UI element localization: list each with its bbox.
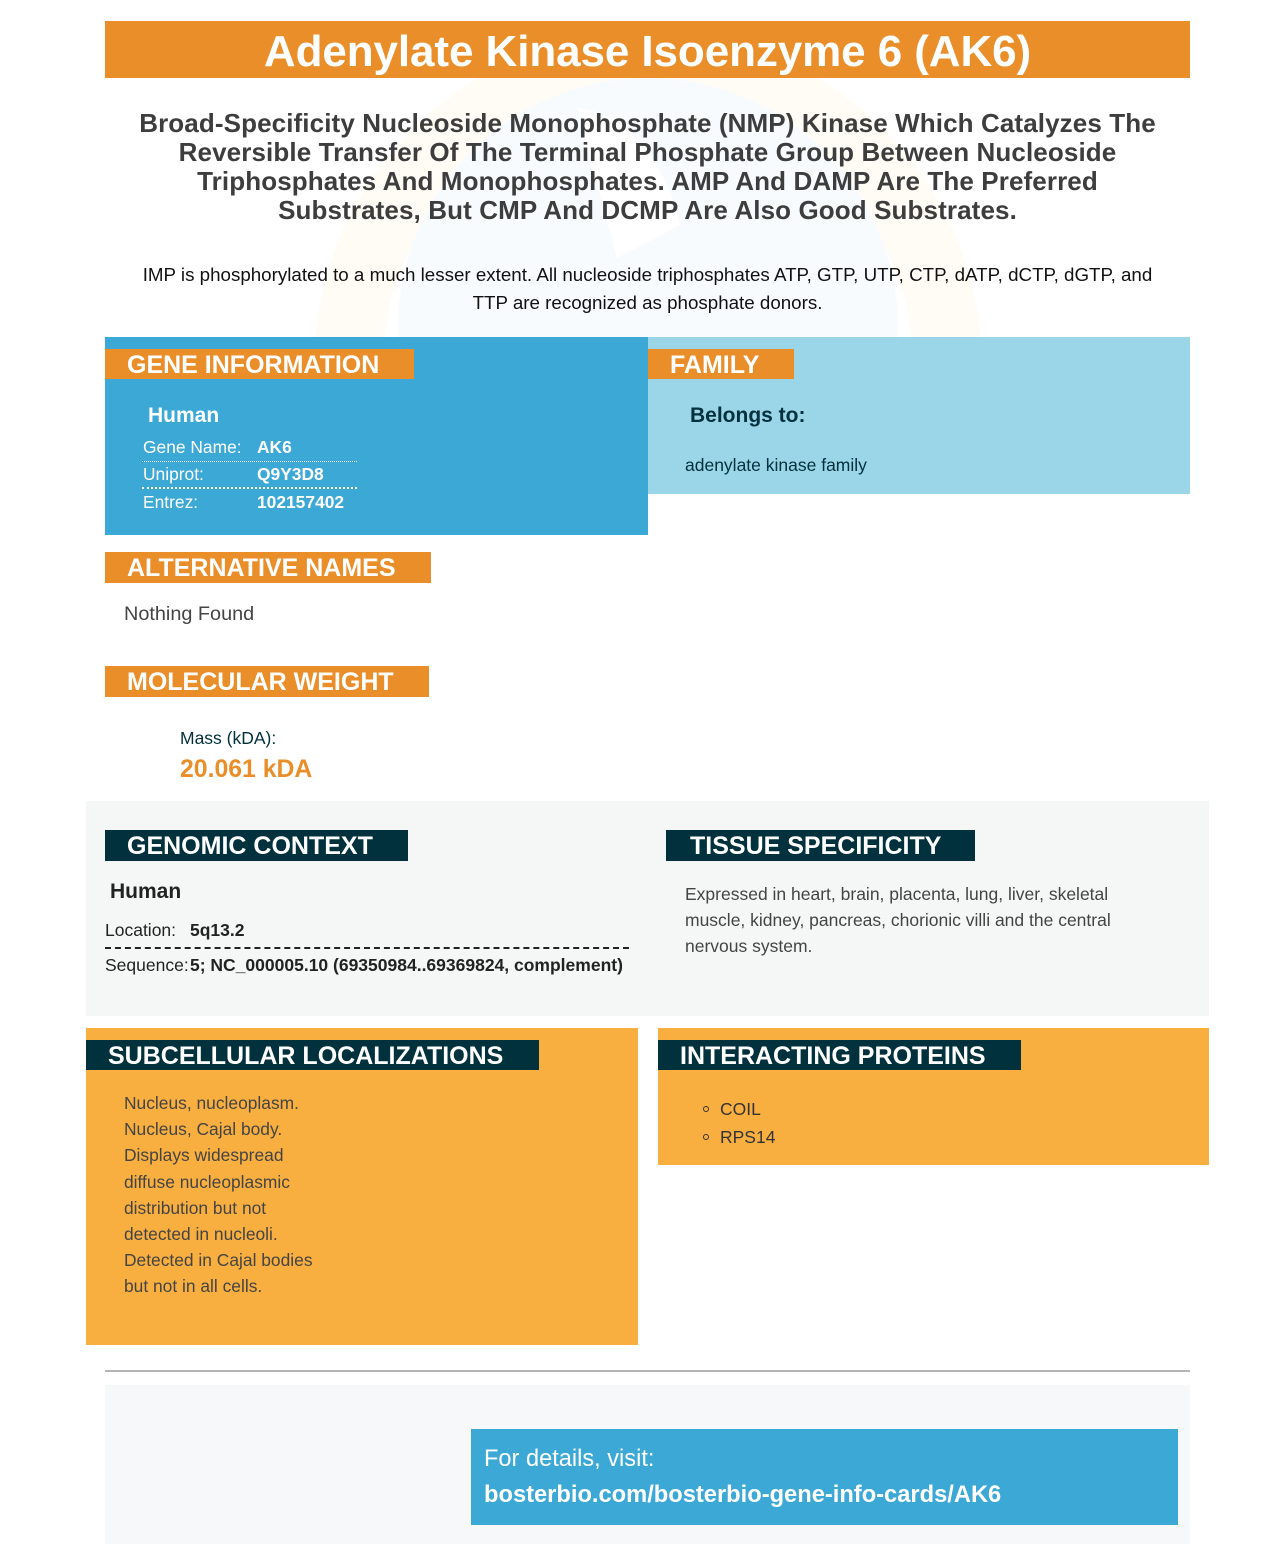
- localization text: Detected in Cajal bodies: [124, 1250, 313, 1270]
- description: TTP are recognized as phosphate donors.: [473, 292, 822, 313]
- title banner: [105, 21, 1190, 78]
- species label: Human: [148, 404, 219, 427]
- subtitle: Broad-Specificity Nucleoside Monophosphate (NMP) Kinase Which Catalyzes The: [139, 108, 1156, 138]
- uniprot row: Q9Y3D8: [257, 464, 324, 484]
- tissue specificity text: muscle, kidney, pancreas, chorionic villi and the central: [685, 910, 1111, 930]
- location row: Location:: [105, 920, 176, 940]
- panel: gene information: [105, 337, 648, 535]
- title banner: Adenylate Kinase Isoenzyme 6 (AK6): [264, 27, 1031, 76]
- panel: interacting proteins: [658, 1028, 1209, 1165]
- entrez row: 102157402: [257, 492, 344, 512]
- tissue specificity text: nervous system.: [685, 936, 812, 956]
- belongs to label: Belongs to:: [690, 404, 806, 427]
- visit label: For details, visit:: [484, 1446, 654, 1472]
- subtitle: Triphosphates And Monophosphates. AMP And DAMP Are The Preferred: [197, 166, 1098, 196]
- localization text: diffuse nucleoplasmic: [124, 1172, 290, 1192]
- background watermark logo: [316, 78, 980, 337]
- family text: adenylate kinase family: [685, 455, 867, 475]
- localization text: detected in nucleoli.: [124, 1224, 278, 1244]
- uniprot row: [142, 462, 357, 489]
- species label: Human: [110, 880, 181, 903]
- call to action box: [471, 1429, 1178, 1525]
- alternative names text: Nothing Found: [124, 603, 254, 625]
- gene name row: AK6: [257, 437, 292, 457]
- protein list: RPS14: [720, 1127, 775, 1147]
- localization text: [124, 1093, 313, 1296]
- description: IMP is phosphorylated to a much lesser extent. All nucleoside triphosphates ATP, GTP, UTP, CTP, dATP, dCTP, dGTP, and: [143, 264, 1152, 285]
- location row: 5q13.2: [190, 920, 244, 940]
- mass label: Mass (kDA):: [180, 728, 276, 748]
- heading: family: FAMILY: [670, 351, 759, 379]
- gene name row: Gene Name:: [143, 437, 242, 457]
- panel: family: [648, 337, 1190, 494]
- heading: gene information: GENE INFORMATION: [127, 351, 379, 379]
- subtitle: Substrates, But CMP And DCMP Are Also Good Substrates.: [278, 195, 1017, 225]
- location row: [105, 917, 629, 949]
- visit url: bosterbio.com/bosterbio-gene-info-cards/AK6: [484, 1482, 1001, 1508]
- protein list: COIL: [720, 1099, 761, 1119]
- heading: molecular weight: MOLECULAR WEIGHT: [127, 668, 394, 696]
- tissue specificity text: [685, 884, 1111, 956]
- uniprot row: Uniprot:: [143, 464, 204, 484]
- heading: subcellular localizations: SUBCELLULAR LOCALIZATIONS: [108, 1042, 503, 1070]
- gene name row: [142, 435, 357, 462]
- sequence row: Sequence:: [105, 955, 189, 975]
- footer panel: [105, 1385, 1190, 1544]
- entrez row: Entrez:: [143, 492, 198, 512]
- heading: tissue specificity: TISSUE SPECIFICITY: [690, 832, 941, 860]
- protein list: [703, 1099, 775, 1147]
- panel: genomic context and tissue specificity band: [86, 801, 1209, 1016]
- mass value: 20.061 kDA: [180, 756, 312, 783]
- localization text: Nucleus, Cajal body.: [124, 1119, 282, 1139]
- localization text: Displays widespread: [124, 1145, 284, 1165]
- localization text: Nucleus, nucleoplasm.: [124, 1093, 299, 1113]
- heading: interacting proteins: INTERACTING PROTEINS: [680, 1042, 986, 1070]
- tissue specificity text: Expressed in heart, brain, placenta, lung, liver, skeletal: [685, 884, 1108, 904]
- localization text: distribution but not: [124, 1198, 266, 1218]
- localization text: but not in all cells.: [124, 1276, 262, 1296]
- subtitle: [139, 108, 1156, 225]
- sequence row: 5; NC_000005.10 (69350984..69369824, complement): [190, 955, 623, 975]
- panel: subcellular localizations: [86, 1028, 638, 1345]
- subtitle: Reversible Transfer Of The Terminal Phosphate Group Between Nucleoside: [179, 137, 1116, 167]
- heading: family: [648, 349, 794, 379]
- description: [143, 264, 1152, 313]
- heading: genomic context: GENOMIC CONTEXT: [127, 832, 373, 860]
- heading: alternative names: ALTERNATIVE NAMES: [127, 554, 396, 582]
- entrez row: [143, 492, 344, 512]
